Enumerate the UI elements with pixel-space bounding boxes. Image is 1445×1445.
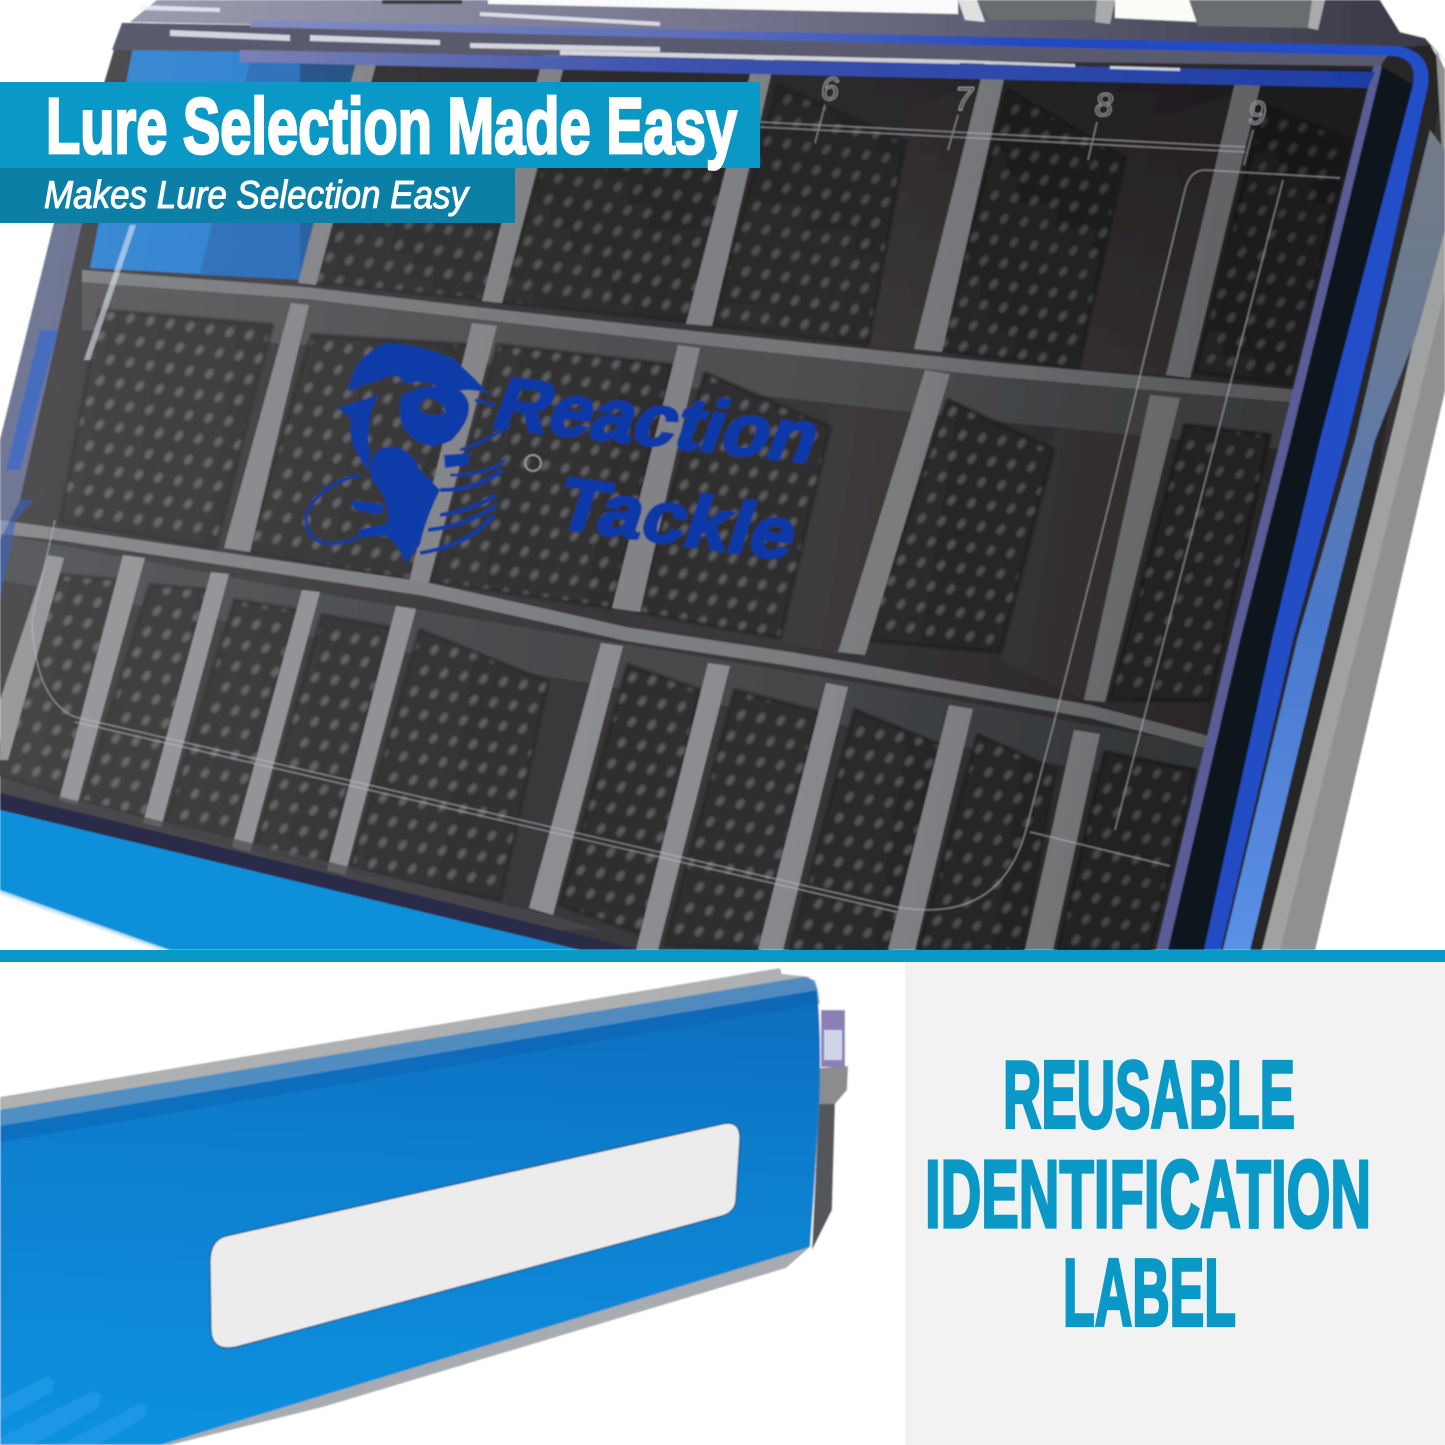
blue body: [0, 977, 820, 1445]
banner: headline: [0, 81, 760, 170]
molded lines on lid: [32, 105, 1340, 912]
clear area and hinges at top: [382, 0, 1445, 60]
banner: subheading: Makes Lure Selection Easy: [44, 174, 470, 217]
inner blue strip: [240, 50, 1375, 88]
darkening of the far row: [300, 60, 1380, 400]
gray wall under divider 1: [82, 282, 1300, 450]
lid numerals: [821, 71, 1266, 131]
top lid band: [130, 0, 1445, 60]
purple lid edge: [1156, 64, 1382, 950]
vertical dividers, row 1: [298, 40, 1263, 378]
white glints on lid: [140, 5, 1180, 71]
photo: tackle box compartments: [0, 0, 1445, 950]
clear lid end: [821, 1010, 845, 1067]
logo text: Tackle: Tackle: [547, 462, 809, 575]
gray latch end: [819, 1066, 848, 1104]
haze on clear lid: [0, 23, 1445, 950]
dark lines between rims: [1164, 65, 1413, 950]
bright blue base: [0, 810, 580, 950]
heading: reusable identification label: [925, 1042, 1371, 1346]
dimpled compartment walls: [0, 85, 1350, 950]
outer gray shell: [1262, 50, 1445, 950]
horizontal divider 1: [82, 270, 1318, 404]
divider bar: [0, 950, 1445, 962]
saturated blue rim: [250, 20, 1428, 950]
logo: Reaction Tackle bass: [306, 343, 833, 575]
gray wall under divider 2: [0, 534, 1205, 790]
fish tail swirl and wake lines: [306, 400, 510, 553]
vertical dividers, row 3: [0, 555, 1100, 950]
logo text: Reaction: Reaction: [483, 362, 833, 478]
heading: Lure Selection Made Easy: [46, 81, 737, 170]
box interior: [0, 23, 1445, 950]
lid numerals: 9: [1248, 95, 1266, 131]
panel: identification label photo: [0, 964, 910, 1445]
white label slot: [210, 1123, 740, 1348]
vertical dividers, row 2: [224, 303, 1180, 702]
textured top edge: [0, 977, 818, 1126]
fish icon: [338, 343, 490, 563]
lid numerals: 8: [1095, 87, 1113, 123]
panel: label text background: [905, 962, 1445, 1445]
row 1 panels: [310, 205, 520, 300]
light blue side rim: [1223, 130, 1445, 950]
heading: reusable identification label: LABEL: [1063, 1240, 1236, 1346]
lid numerals: 6: [821, 71, 839, 107]
row 3 panels: [0, 575, 118, 795]
blue foam visible through lid: [90, 37, 360, 280]
silver lid edge: [0, 968, 812, 1112]
row 2 panels: [60, 310, 272, 548]
left lid streaks: [0, 223, 136, 600]
horizontal divider 2: [0, 520, 1235, 748]
grip ridges: [0, 1376, 147, 1445]
floor walls beside panels: [780, 80, 1240, 700]
lid numerals: 7: [955, 81, 974, 117]
gray base edge: [140, 1247, 810, 1445]
dark front edge of lid: [0, 793, 640, 950]
